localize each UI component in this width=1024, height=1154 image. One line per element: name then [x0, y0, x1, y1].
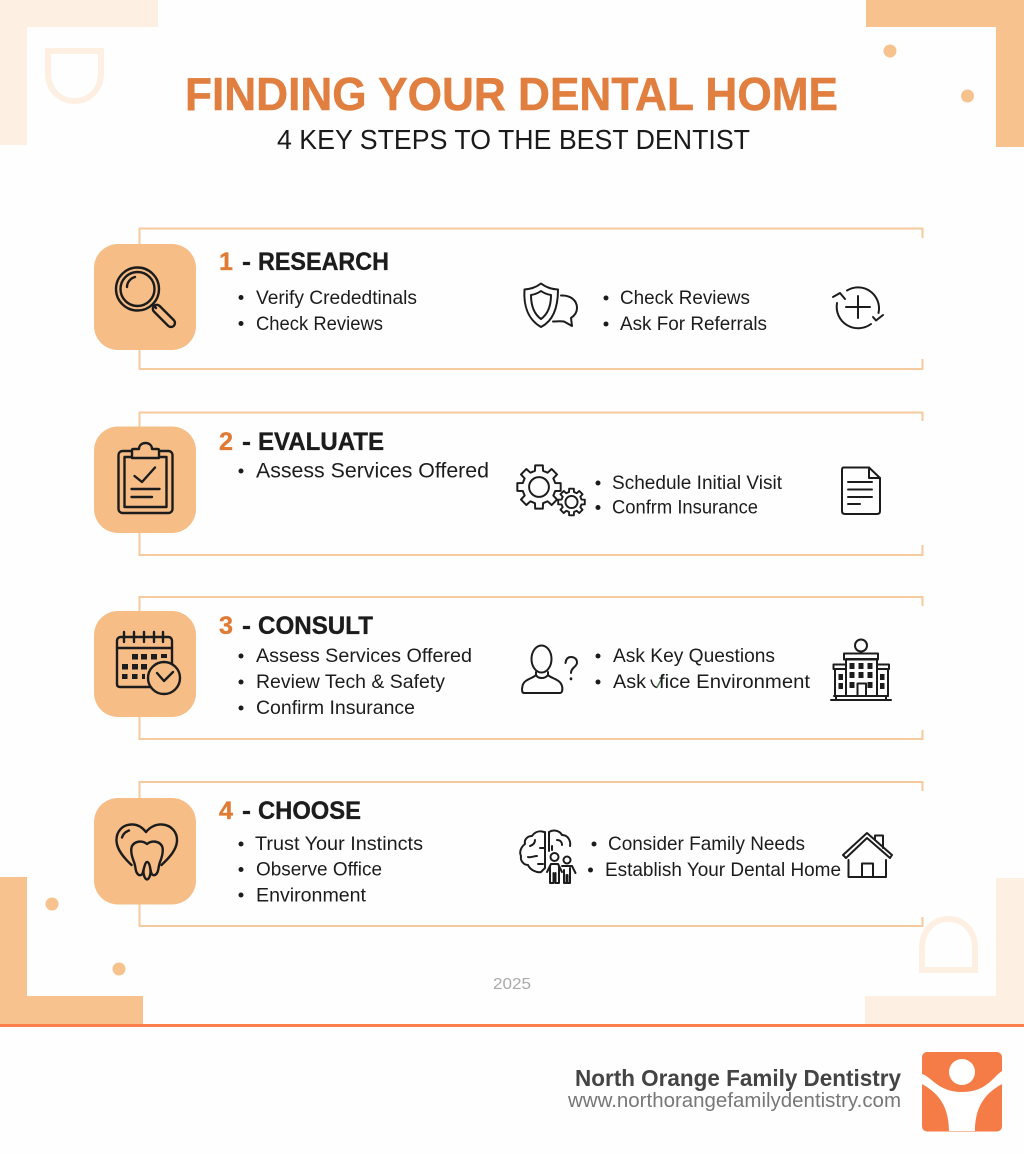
left bullet list: Trust Your Instincts: [255, 833, 423, 855]
panel: step 4 choose: [94, 782, 922, 926]
subtitle: 4 KEY STEPS TO THE BEST DENTIST: [277, 124, 750, 155]
heading: [219, 797, 361, 825]
panel frame: [140, 412, 922, 555]
heading: CHOOSE: [258, 797, 361, 825]
icon tile: magnifying glass: [94, 244, 196, 350]
icon: house: [843, 833, 892, 877]
left bullet list: [238, 833, 423, 906]
decorative shield outline: [48, 51, 101, 101]
right bullet list: Ask Key Questions: [613, 645, 775, 667]
heading: RESEARCH: [258, 248, 389, 276]
left bullet list: Verify Crededtinals: [256, 287, 417, 309]
icon: shield with speech bubble: [524, 284, 577, 327]
panel: step 2 evaluate: [94, 412, 922, 555]
icon: gears: [517, 465, 585, 515]
heading: 1: [219, 248, 233, 276]
right bullet list: Check Reviews: [620, 287, 750, 309]
icon: plus with cycle arrows: [833, 287, 883, 328]
left bullet list: Review Tech & Safety: [256, 671, 445, 693]
right bullet list: [596, 472, 783, 518]
icon: brain with family: [520, 831, 576, 883]
heading: EVALUATE: [258, 428, 384, 456]
heading: 3: [219, 612, 233, 640]
right bullet list: fice Environment: [659, 671, 811, 693]
right bullet list: Confrm Insurance: [612, 496, 758, 518]
right bullet list: [596, 645, 811, 693]
heading: 2: [219, 428, 233, 456]
decorative dot: top right upper: [884, 44, 896, 58]
icon: person with question mark: [522, 646, 577, 693]
right bullet list: Consider Family Needs: [608, 833, 805, 855]
left bullet list: Environment: [256, 884, 367, 906]
left bullet list: Check Reviews: [256, 313, 383, 335]
footer website: www.northorangefamilydentistry.com: [567, 1090, 901, 1112]
year label: 2025: [493, 976, 531, 993]
icon tile: calendar with clock: [94, 611, 196, 717]
panel: step 3 consult: [94, 597, 922, 739]
left bullet list: Assess Services Offered: [256, 460, 489, 482]
panel frame: [140, 782, 922, 926]
decorative dot: bottom left upper: [46, 898, 58, 910]
decorative arch outline: [922, 919, 975, 970]
icon: building: [831, 640, 891, 700]
left bullet list: Observe Office: [256, 858, 382, 880]
panel frame: [140, 597, 922, 739]
corner decoration: top right: [866, 0, 1024, 147]
right bullet list: Establish Your Dental Home: [605, 859, 841, 881]
heading: -: [242, 248, 251, 276]
panel frame: [140, 228, 922, 369]
corner decoration: top left: [0, 0, 158, 145]
footer divider: [0, 1024, 1024, 1027]
heading: 4: [219, 797, 233, 825]
left bullet list: Confirm Insurance: [256, 697, 415, 719]
title: FINDING YOUR DENTAL HOME: [185, 68, 838, 120]
footer logo: [922, 1052, 1002, 1132]
heading: -: [242, 797, 251, 825]
right bullet list: [604, 287, 767, 335]
left bullet list: Assess Services Offered: [256, 645, 472, 667]
right bullet list: Schedule Initial Visit: [612, 472, 783, 494]
icon tile: tooth in heart: [94, 798, 196, 904]
right bullet list: Ask For Referrals: [620, 313, 767, 335]
heading: CONSULT: [258, 612, 373, 640]
icon: document: [842, 468, 880, 514]
right bullet list: [588, 833, 841, 881]
left bullet list: [238, 645, 472, 719]
panel: step 1 research: [94, 228, 922, 369]
decorative dot: top right lower: [961, 90, 974, 102]
footer brand name: North Orange Family Dentistry: [575, 1065, 901, 1091]
decorative dot: bottom left lower: [112, 962, 126, 976]
icon tile: clipboard: [94, 426, 196, 533]
right bullet list: Ask: [613, 671, 646, 693]
corner decoration: bottom right: [865, 878, 1024, 1024]
left bullet list: [238, 287, 417, 335]
heading: -: [242, 428, 251, 456]
heading: -: [242, 612, 251, 640]
corner decoration: bottom left: [0, 877, 143, 1024]
